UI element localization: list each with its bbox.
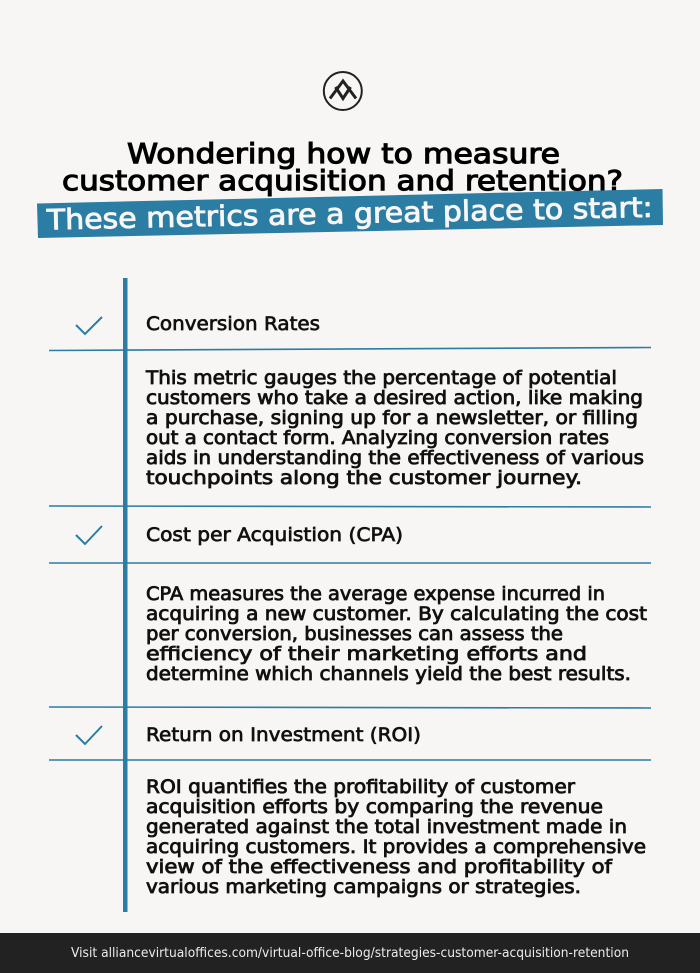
title: customer acquisition and retention?: [62, 164, 623, 197]
icon: check mark: [76, 317, 102, 334]
heading: conversion rates: Conversion Rates: [146, 313, 320, 335]
vertical timeline bar: [123, 278, 128, 912]
icon: logo: [324, 72, 362, 110]
banner: These metrics are a great place to start:: [45, 191, 653, 237]
section: conversion rates: [76, 313, 644, 489]
text: return on investment description: ROI quantifies the profitability of customer: [146, 777, 576, 798]
heading: return on investment: Return on Investment (ROI): [146, 724, 421, 746]
text: return on investment description: generated against the total investment made in: [146, 817, 627, 838]
section: cost per acquisition: [76, 524, 647, 685]
section: return on investment: [76, 724, 646, 898]
text: conversion rates description: touchpoints along the customer journey.: [146, 468, 582, 489]
text: conversion rates description: out a contact form. Analyzing conversion rates: [146, 428, 609, 449]
text: return on investment description: view of the effectiveness and profitability of: [146, 857, 613, 878]
text: return on investment description: acquiring customers. It provides a comprehensive: [146, 837, 646, 858]
icon: check mark: [76, 526, 102, 544]
text: cost per acquisition description: [146, 584, 647, 685]
footer link text: Visit alliancevirtualoffices.com/virtual-office-blog/strategies-customer-acquisition-retention: [71, 946, 629, 961]
icon: check mark: [76, 726, 102, 744]
heading: cost per acquisition: Cost per Acquistion (CPA): [146, 524, 403, 546]
text: cost per acquisition description: determine which channels yield the best results.: [146, 664, 631, 685]
text: cost per acquisition description: efficiency of their marketing efforts and: [146, 644, 587, 665]
text: return on investment description: various marketing campaigns or strategies.: [146, 877, 581, 898]
text: return on investment description: [146, 777, 646, 898]
footer bar: [0, 933, 700, 973]
text: cost per acquisition description: acquiring a new customer. By calculating the cost: [146, 604, 647, 625]
text: conversion rates description: [145, 368, 644, 489]
title: [62, 137, 623, 197]
text: conversion rates description: a purchase, signing up for a newsletter, or filling: [146, 408, 638, 429]
text: conversion rates description: aids in understanding the effectiveness of various: [146, 448, 644, 469]
title: Wondering how to measure: [127, 137, 560, 170]
text: return on investment description: acquisition efforts by comparing the revenue: [146, 797, 603, 818]
text: cost per acquisition description: per conversion, businesses can assess the: [146, 624, 563, 645]
text: conversion rates description: This metric gauges the percentage of potential: [145, 368, 617, 389]
text: conversion rates description: customers who take a desired action, like making: [146, 388, 643, 409]
text: cost per acquisition description: CPA measures the average expense incurred in: [146, 584, 605, 605]
row dividers: [49, 348, 651, 760]
